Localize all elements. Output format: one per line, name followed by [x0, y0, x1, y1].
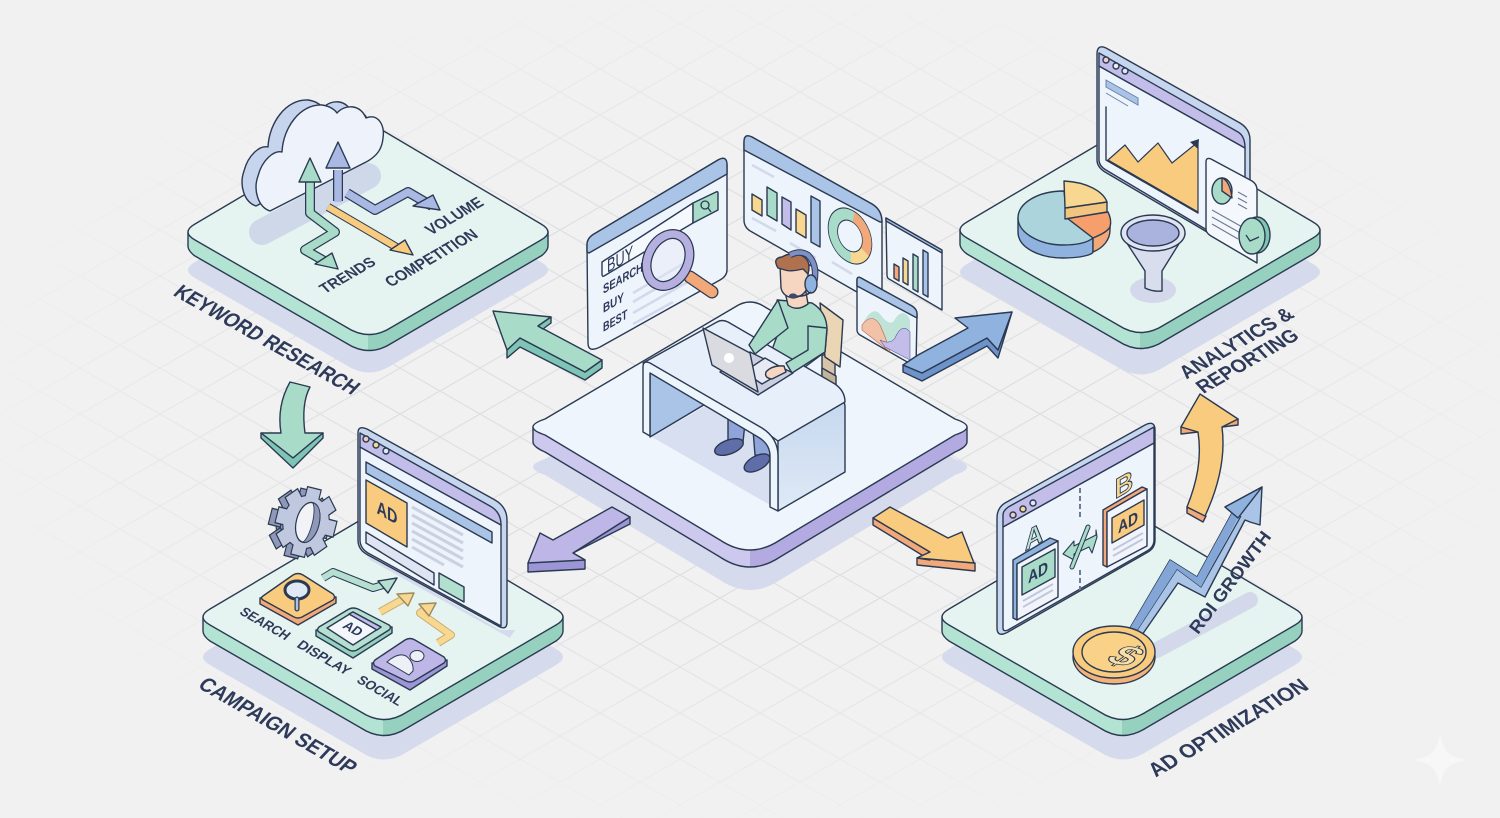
window: search: BUY	[603, 289, 624, 316]
arrow: social to ad	[419, 603, 451, 643]
ad variant b: AD	[1118, 507, 1138, 538]
ad variant b: B	[1115, 464, 1133, 505]
arrow: volume	[326, 142, 440, 210]
ad variant b	[1103, 464, 1147, 567]
tile: display	[316, 608, 392, 658]
panel: campaign setup	[203, 428, 563, 760]
arrow: keyword research to campaign setup	[261, 382, 323, 468]
text: display: DISPLAY	[294, 638, 354, 678]
icon: coin	[1073, 626, 1156, 684]
ad block	[366, 480, 407, 547]
tile: display: AD	[340, 618, 367, 639]
text: competition: COMPETITION	[381, 226, 482, 290]
text: volume: VOLUME	[421, 194, 488, 238]
window: search: BEST	[603, 306, 627, 335]
panel: keyword research	[188, 100, 548, 373]
arrow: ad optimization to analytics	[1181, 394, 1238, 522]
arrow: center to ad optimization	[873, 507, 975, 571]
icon: coin: $	[1096, 639, 1156, 672]
heading: analytics and reporting: ANALYTICS &	[1175, 304, 1299, 383]
ad variant a: AD	[1028, 557, 1048, 588]
ad block: AD	[377, 497, 397, 530]
window: search	[587, 158, 727, 349]
text: trends: TRENDS	[316, 254, 380, 297]
heading: campaign setup: CAMPAIGN SETUP	[193, 673, 362, 779]
window: area chart	[1097, 47, 1250, 232]
arrow: search to ad	[323, 572, 397, 593]
window: small bar chart	[886, 218, 942, 310]
person torso	[770, 300, 827, 373]
arrow: center to analytics	[903, 312, 1012, 381]
tile: social	[372, 638, 447, 690]
text: search: SEARCH	[237, 605, 294, 643]
arrow: competition	[328, 207, 413, 255]
tile: search	[260, 574, 336, 625]
desk	[643, 320, 845, 511]
window: search: BUY	[607, 242, 633, 278]
pie chart	[1018, 181, 1111, 258]
icon: sparkle	[1415, 735, 1465, 785]
panel: analytics and reporting	[960, 47, 1320, 374]
icon: magnifier	[638, 227, 712, 293]
text: social: SOCIAL	[354, 673, 407, 708]
arrow: roi growth	[1130, 487, 1262, 635]
arrow shadow	[1157, 600, 1250, 650]
heading: ad optimization: AD OPTIMIZATION	[1143, 674, 1314, 781]
person arms and head	[749, 252, 827, 379]
icon: gear	[262, 480, 343, 566]
legs and shoes	[713, 413, 773, 476]
window: area chart mini	[857, 277, 917, 367]
icon: cloud	[242, 100, 383, 211]
ad variant a: A	[1025, 516, 1043, 557]
donut chart	[831, 207, 869, 265]
ad variant a	[1013, 516, 1058, 620]
text: roi growth: ROI GROWTH	[1185, 527, 1275, 638]
comparison arrows	[1063, 527, 1097, 567]
funnel	[1121, 215, 1185, 303]
arrow: center to campaign setup	[528, 507, 630, 572]
window: a/b test	[997, 423, 1155, 634]
heading: analytics and reporting: REPORTING	[1192, 325, 1304, 398]
panel: central workstation	[533, 136, 967, 590]
window: search: SEARCH	[603, 259, 643, 297]
chair	[820, 303, 843, 387]
window: dashboard	[744, 136, 882, 292]
arrow: display to ad	[380, 593, 414, 612]
arrow: trends	[299, 158, 338, 269]
laptop	[703, 328, 793, 395]
arrow: center to keyword research	[493, 311, 602, 380]
heading: keyword research: KEYWORD RESEARCH	[169, 281, 365, 399]
panel: ad optimization	[942, 423, 1302, 760]
document with badge	[1206, 158, 1270, 263]
window: ad preview	[358, 428, 515, 638]
